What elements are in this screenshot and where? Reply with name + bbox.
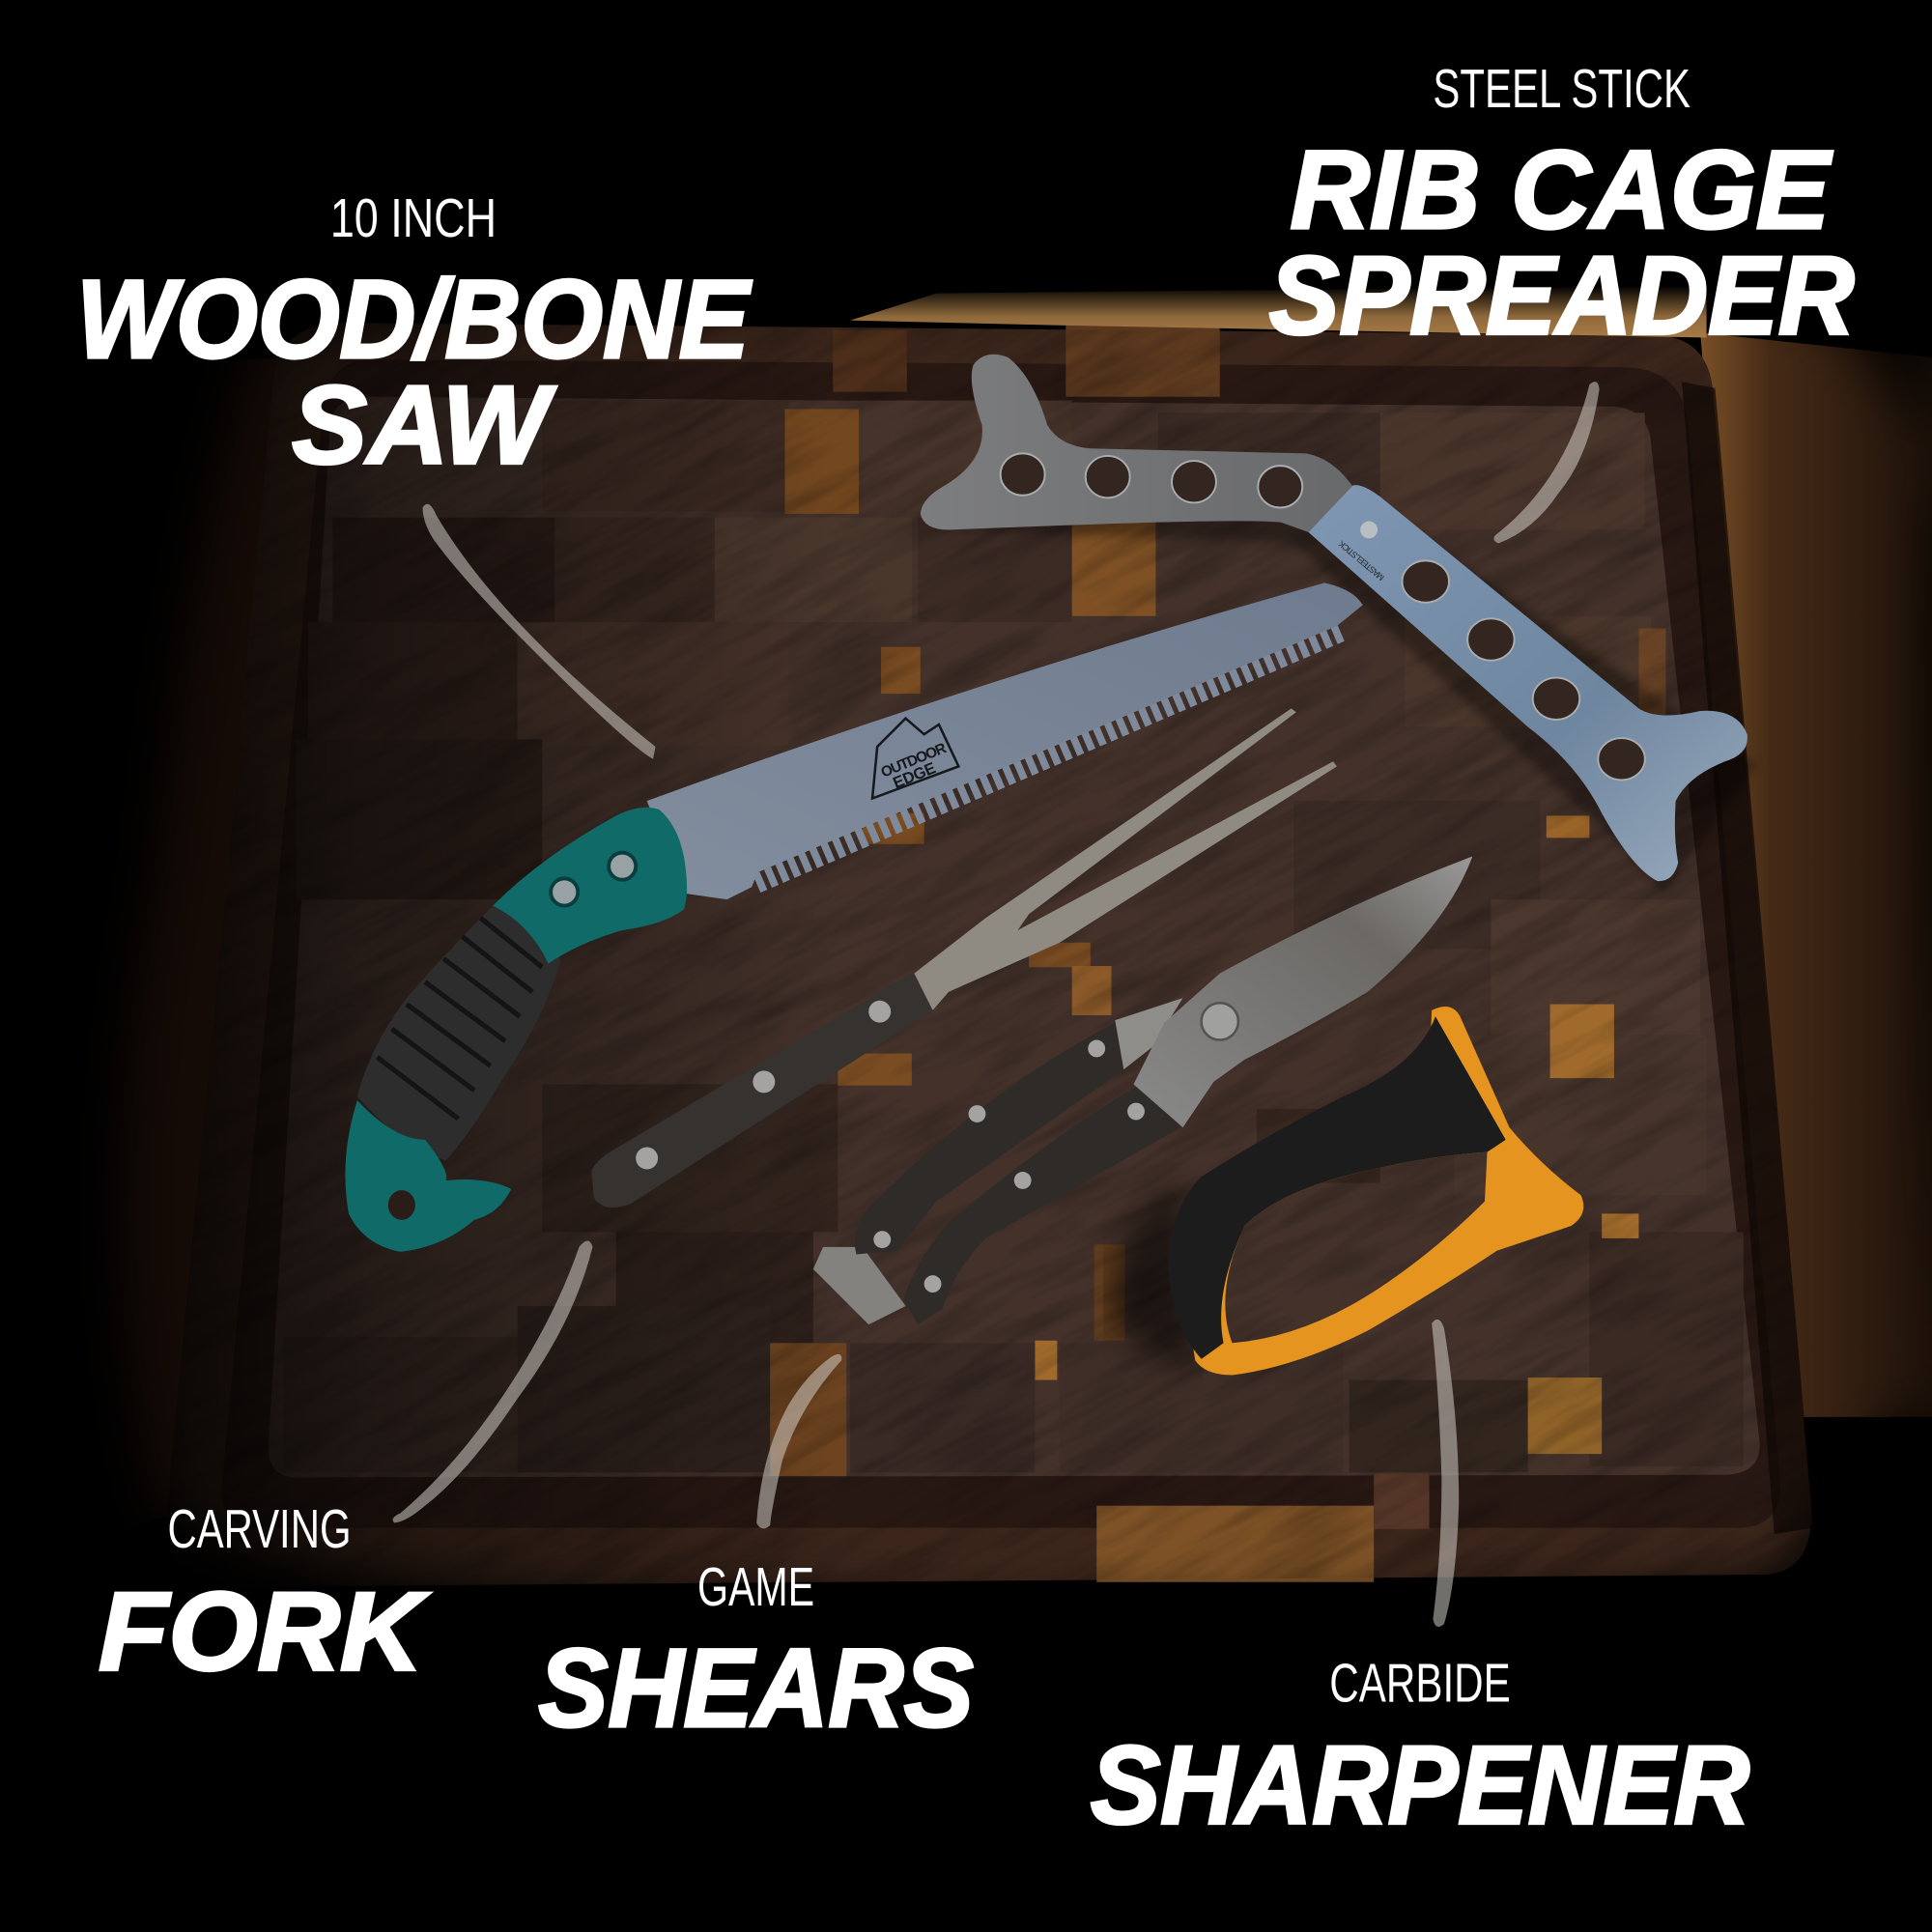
saw logo [872,719,958,799]
sharpener shadow [1112,1182,1195,1374]
spreader brand mark: MASTEELSTICK [1337,539,1386,582]
shears blade [1133,856,1472,1127]
callout stroke: sharpener [1432,1320,1459,1627]
shears pivot [1202,1003,1238,1040]
callout stroke: fork [393,1240,593,1523]
heading line 1: RIB CAGE [1290,128,1833,252]
shears upper handle [855,1023,1123,1254]
heading: SHEARS [538,1627,974,1750]
right rim shade [1682,382,1814,1534]
label: 10 inch wood/bone saw [76,187,753,488]
tool: saw [345,582,1363,1252]
subheading: STEEL STICK [1433,58,1690,119]
cutting board [166,323,1814,1587]
heading line 1: WOOD/BONE [76,258,753,382]
fork rivets [636,1001,891,1169]
fork handle [591,974,933,1208]
shears catch [813,1247,906,1324]
saw handle head [493,808,687,963]
heading line 2: SPREADER [1269,235,1855,358]
label: carving fork [99,1498,430,1693]
board rim [166,323,1811,1587]
grip ridges [377,918,542,1119]
juice groove [221,359,1780,1528]
callout stroke: shears [756,1354,841,1528]
table top edge [850,286,1707,337]
heading: SHARPENER [1091,1724,1749,1848]
left falloff shade [166,323,838,1587]
end-grain blocks [283,401,1744,1472]
shears rivets [873,1040,1145,1293]
table surface [1700,332,1932,1417]
saw teeth [754,632,1341,885]
shears lower handle [903,1084,1180,1324]
saw handle hook [345,1100,511,1252]
tool: rib cage spreader [921,355,1756,894]
callout stroke: spreader [1493,382,1600,543]
sharpener orange frame [1182,1007,1583,1375]
label: game shears [538,1556,974,1750]
subheading: 10 INCH [330,187,497,248]
left table shade [74,357,283,1540]
saw logo: EDGE [891,758,938,792]
lit orange blocks [770,323,1665,1582]
spreader holes [1001,453,1645,780]
heading line 2: SAW [292,364,556,488]
wood grain texture [166,323,1811,1587]
spreader upper arm [921,355,1353,532]
subheading: CARVING [167,1498,352,1559]
tool: game shears [813,856,1472,1324]
tool: carving fork [591,708,1337,1208]
spreader rivet [1360,522,1378,538]
fork tines and bolster [914,708,1337,1010]
callout stroke: saw [423,504,656,759]
spreader lower arm [1309,485,1747,881]
label: steel stick rib cage spreader [1269,58,1855,358]
sharpener black grip [1168,1016,1506,1359]
subheading: GAME [697,1556,814,1617]
top face [269,397,1760,1477]
saw logo: OUTDOOR [879,740,949,781]
heading: FORK [99,1570,430,1693]
shears link [1115,998,1182,1069]
handle screws [551,878,578,906]
label: carbide sharpener [1091,1652,1749,1848]
saw blade [647,582,1363,899]
spreader shadow [936,493,1756,894]
tool: carbide sharpener [1112,1007,1583,1375]
saw handle grip [357,906,560,1161]
subheading: CARBIDE [1329,1652,1511,1713]
hook hole [388,1190,415,1220]
